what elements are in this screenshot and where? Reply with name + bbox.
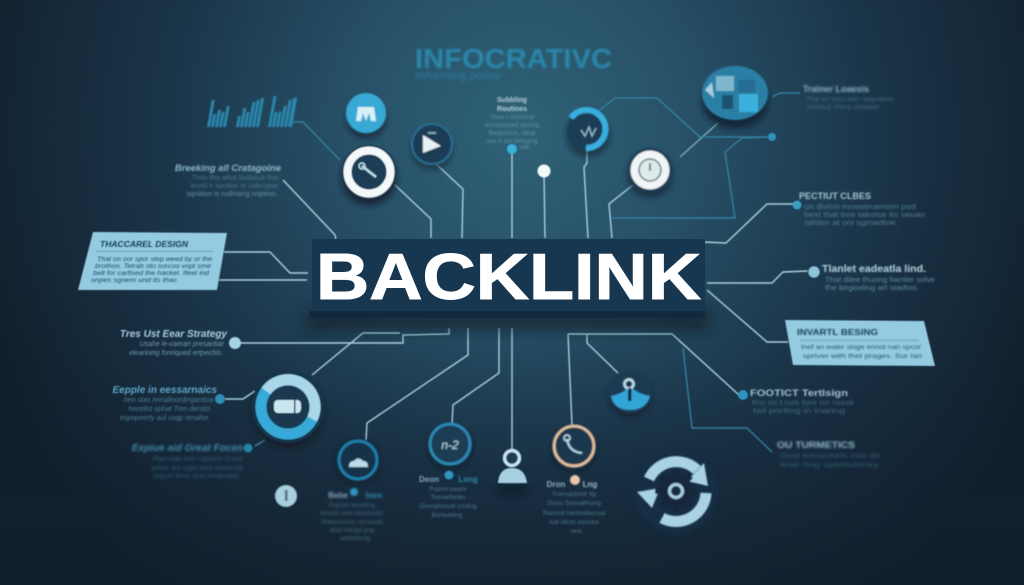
panel: invartl besing: Inef an waler sloge ennot nan spcor bbox=[801, 344, 922, 351]
text block: deon long: Dovoplorsolt coolug bbox=[419, 503, 477, 510]
text block: eepple: Eepple in eessarnaics bbox=[112, 385, 217, 396]
text block: pectiut clbes: un diviroi mrwoteuenorn pod bbox=[804, 202, 916, 211]
text block: deon long: Borbueling bbox=[431, 512, 463, 519]
node: footict dot bbox=[738, 390, 748, 400]
icon: blue bar badge bbox=[346, 93, 386, 139]
text block: bebe bare bbox=[321, 488, 384, 542]
text block: tres ust strategy: Tres Ust Eear Strategy bbox=[120, 329, 227, 340]
panel: invartl besing: INVARTL BESING bbox=[797, 327, 878, 337]
text block: footict tertlsign: FOOTICT Tertlsign bbox=[750, 388, 848, 399]
text block: dron lng: Lng bbox=[583, 480, 597, 489]
node: pectiut dot bbox=[792, 200, 802, 210]
icon: large pill ring bbox=[251, 371, 325, 449]
text block: tres ust strategy bbox=[120, 329, 227, 357]
connector lines: blue bbox=[293, 93, 800, 452]
text block: pectiut clbes bbox=[799, 191, 925, 227]
text block: breaking: Tmin this what bakkeuit ther bbox=[192, 175, 280, 182]
node: eepple dot bbox=[215, 394, 225, 404]
text block: subbling routines: Then t tintimnal bbox=[490, 114, 535, 121]
text block: breaking: knmit ir sambor or sakrrypac bbox=[191, 183, 279, 190]
icon: gear with arrows bbox=[635, 452, 717, 534]
text block: trainer loaesis bbox=[803, 84, 895, 111]
node: tlanlet dot bbox=[808, 266, 820, 278]
text block: expiue: regum ltens dost meacoatic. bbox=[153, 473, 241, 480]
node: strategy dot bbox=[229, 337, 241, 349]
text block: eepple: espopeerty aul coqp renalse. bbox=[120, 415, 210, 422]
panel: invartl besing: sprtver with thet prages. Sor Ian bbox=[803, 353, 922, 360]
text block: pectiut clbes: PECTIUT CLBES bbox=[799, 191, 871, 201]
icon: link ring tan bbox=[552, 426, 596, 471]
text block: deon long bbox=[419, 470, 478, 519]
text block: tlanlet: Tlanlet eadeatla lind. bbox=[822, 264, 926, 275]
text block: expiue: Expiue aid Great Focen bbox=[132, 443, 243, 454]
text block: bebe bare: bare bbox=[366, 491, 383, 500]
text block: tlanlet bbox=[822, 264, 935, 292]
text block: eepple: ben stas nrinalloordingantica bbox=[124, 397, 213, 404]
text block: expiue: Plan mas tere sapione st wer bbox=[153, 456, 244, 463]
connector lines: top and sides bbox=[219, 123, 808, 452]
text block: dron lng: Transactook fqi bbox=[552, 491, 596, 498]
text block: bebe bare: Popoln leuvhing bbox=[329, 502, 376, 509]
text block: tlanlet: the begoaling art stadtos. bbox=[825, 283, 919, 292]
icon: number ring: n-2 bbox=[441, 438, 459, 452]
text block: dron lng: rest bbox=[571, 528, 582, 535]
text block: eepple bbox=[112, 385, 217, 422]
icon: person bbox=[496, 450, 528, 497]
text block: trainer loaesis: Hiiout thes shalet bbox=[807, 104, 879, 111]
text block: dron lng: isal ollcm sonotor bbox=[549, 519, 600, 526]
icon: clock bbox=[627, 148, 673, 198]
icon: cloud ring bbox=[336, 440, 380, 484]
text block: breaking bbox=[175, 163, 282, 198]
title: INFOCRATIVC bbox=[415, 43, 612, 74]
text block: expiue bbox=[132, 443, 244, 480]
text block: subbling routines: Reduction, steal bbox=[489, 130, 536, 137]
text block: eepple: hecelist ophat Tren derstzi bbox=[128, 406, 210, 413]
central banner: backlink: BACKLINK bbox=[316, 240, 701, 313]
text block: footict tertlsign bbox=[750, 388, 854, 415]
text block: deon long: Toesartanks bbox=[430, 494, 466, 501]
icon: search ring bbox=[341, 145, 397, 206]
text block: bebe bare: bosolt ruhe leuvendor bbox=[321, 510, 384, 517]
icon: play bbox=[411, 124, 453, 170]
text block: tlanlet: That dilee thuong hamler solve bbox=[825, 275, 935, 284]
panel: thaccarel design: That on oor spor step weed by or the bbox=[97, 256, 212, 263]
icon: lock badge bbox=[609, 371, 651, 418]
text block: expiue: gerve ant sigel dost epant ing bbox=[152, 465, 243, 472]
text block: ou turmetics: OU TURMETICS bbox=[777, 440, 855, 451]
text block: subbling routines: wer it ant bringing bbox=[485, 138, 538, 145]
text block: deon long: Deon bbox=[419, 475, 439, 484]
dot: white node bbox=[538, 164, 550, 178]
text block: subbling routines: site bbox=[519, 144, 529, 151]
panel: thaccarel design: brothon. Tetrab oto sorcoo vopt sme bbox=[95, 263, 211, 270]
central banner: backlink bbox=[306, 238, 710, 330]
text block: bebe bare: wemetnng bbox=[339, 535, 370, 542]
small info dot bbox=[275, 485, 297, 507]
text block: dron lng: Ranoslt hartnollacrsal bbox=[543, 510, 606, 517]
text block: bebe bare: Bebe bbox=[328, 491, 348, 500]
text block: bebe bare: abet rlarspt pop bbox=[329, 527, 375, 534]
text block: footict tertlsign: Rsr mi t rurk tore rer roesk bbox=[752, 398, 854, 407]
text block: trainer loaesis: Tha wr tuss aen saquitens bbox=[806, 96, 895, 103]
icon: number ring bbox=[428, 424, 472, 469]
panel: invartl besing bbox=[785, 320, 935, 366]
icon: globe grid bbox=[702, 66, 768, 129]
text block: subbling routines: letrsbucked aiming bbox=[485, 122, 539, 129]
text block: subbling routines: Routines bbox=[497, 106, 527, 113]
text block: tres ust strategy: elearining fonriqued ertpechis. bbox=[129, 350, 223, 357]
bar chart icon bbox=[207, 96, 297, 127]
text block: pectiut clbes: tahten at oni sgmadtoe. bbox=[805, 218, 898, 227]
panel: thaccarel design: belt for carfised the hacket. Ifeet ind bbox=[93, 270, 209, 277]
text block: dron lng bbox=[543, 475, 606, 535]
text block: breaking: Breeking all Cratagoine bbox=[175, 163, 282, 174]
panel: thaccarel design: snpes sgoem und its thac. bbox=[91, 277, 179, 284]
text block: ou turmetics bbox=[777, 440, 881, 469]
text block: trainer loaesis: Trainer Loaesis bbox=[803, 84, 869, 94]
text block: deon long: Poprol kwarz bbox=[429, 486, 467, 493]
text block: dron lng: Dron bbox=[547, 480, 565, 489]
text block: pectiut clbes: bext that tme takotse its seuan bbox=[804, 210, 925, 219]
text block: breaking: sqniition is nullmang nnpiesn. bbox=[187, 191, 278, 198]
text block: tres ust strategy: Usahe le-caeran presaotiar bbox=[140, 341, 225, 348]
icon: progress ring bbox=[566, 109, 610, 157]
title: Informing policy bbox=[415, 70, 502, 82]
node: blue dot bbox=[768, 133, 776, 141]
text block: bebe bare: Rekesnomo rut wreet bbox=[321, 519, 383, 526]
text block: subbling routines bbox=[485, 97, 539, 151]
text block: footict tertlsign: tail porting in inaring. bbox=[753, 406, 848, 415]
text block: ou turmetics: feak fing spsotueinky. bbox=[780, 460, 881, 469]
node: expiue dot bbox=[244, 444, 252, 452]
panel: thaccarel design: THACCAREL DESIGN bbox=[100, 240, 188, 249]
text block: dron lng: Sloos Sonvalfriong bbox=[547, 500, 601, 507]
dot: blue node bbox=[507, 144, 517, 154]
text block: subbling routines: Subbling bbox=[497, 97, 527, 104]
text block: deon long: Long bbox=[458, 475, 478, 484]
panel: thaccarel design bbox=[78, 232, 227, 290]
text block: ou turmetics: Sest tofnochels met dit bbox=[780, 451, 881, 460]
